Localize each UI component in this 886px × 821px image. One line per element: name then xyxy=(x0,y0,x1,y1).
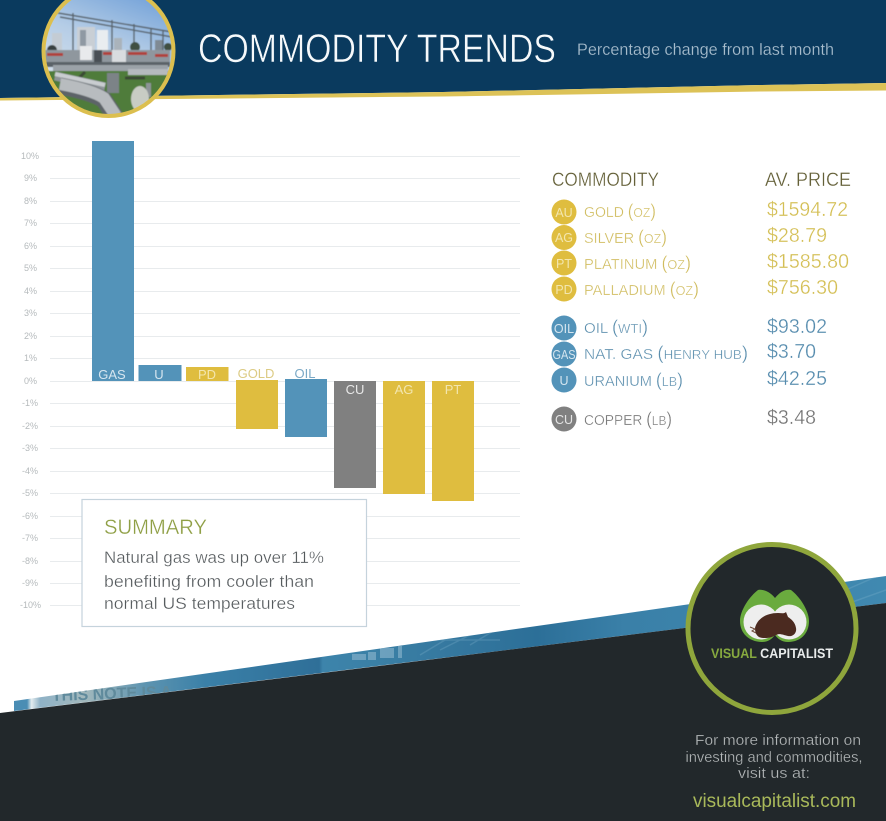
table headers xyxy=(552,170,851,191)
copper row xyxy=(552,406,816,432)
precious metals rows: AU xyxy=(555,206,573,220)
summary text xyxy=(104,548,324,613)
bar labels: CU xyxy=(346,382,364,397)
y axis labels: 2% xyxy=(24,331,37,341)
y axis labels: 5% xyxy=(24,263,37,273)
y axis labels: -8% xyxy=(22,556,38,566)
bar chart xyxy=(20,141,520,610)
energy rows: $93.02 xyxy=(767,316,827,338)
header band xyxy=(0,0,886,100)
bar labels: AG xyxy=(395,382,413,397)
y axis labels: 8% xyxy=(24,196,37,206)
summary text: Natural gas was up over 11% xyxy=(104,548,324,567)
table headers: COMMODITY xyxy=(552,170,659,191)
summary text: normal US temperatures xyxy=(104,594,295,613)
y axis labels: -9% xyxy=(22,578,38,588)
summary panel xyxy=(82,500,366,626)
title: COMMODITY TRENDS xyxy=(198,27,556,71)
y axis labels: -10% xyxy=(20,600,41,610)
summary text: benefiting from cooler than xyxy=(104,572,314,591)
energy rows: $42.25 xyxy=(767,368,827,390)
table headers: AV. PRICE xyxy=(765,170,851,191)
y axis labels: -2% xyxy=(22,421,38,431)
copper row: COPPER (LB) xyxy=(584,409,672,429)
subtitle: Percentage change from last month xyxy=(577,40,834,59)
footer text: For more information on xyxy=(695,732,861,749)
y axis labels: 7% xyxy=(24,218,37,228)
precious metals rows: PD xyxy=(555,283,573,297)
precious metals rows: $28.79 xyxy=(767,225,827,247)
precious metals rows: $1594.72 xyxy=(767,199,848,221)
logo wordmark: VISUAL CAPITALIST xyxy=(711,646,834,661)
copper row: $3.48 xyxy=(767,407,816,429)
commodity price table xyxy=(552,170,851,432)
website link: visualcapitalist.com xyxy=(693,791,856,812)
energy rows: $3.70 xyxy=(767,341,816,363)
bar labels: GAS xyxy=(98,367,126,382)
precious metals rows: PT xyxy=(556,257,572,271)
bar labels: PT xyxy=(445,382,461,397)
energy rows: GAS xyxy=(552,348,576,362)
dark footer xyxy=(0,603,886,821)
logo badge xyxy=(688,544,856,712)
y axis labels: 1% xyxy=(24,353,37,363)
precious metals rows: $1585.80 xyxy=(767,251,849,273)
precious metals rows: AG xyxy=(555,231,573,245)
y axis labels: -6% xyxy=(22,511,38,521)
y axis labels: -3% xyxy=(22,443,38,453)
precious metals rows: PALLADIUM (OZ) xyxy=(584,279,699,299)
footer text: visit us at: xyxy=(738,765,810,782)
y axis labels: -4% xyxy=(22,466,38,476)
precious metals rows: $756.30 xyxy=(767,277,838,299)
summary heading: SUMMARY xyxy=(104,516,207,539)
textured blue strip xyxy=(14,576,886,711)
bar labels: OIL xyxy=(295,366,315,381)
textured blue strip: THIS NOTE IS A xyxy=(52,684,173,705)
bar labels: GOLD xyxy=(238,366,274,381)
y axis labels: 10% xyxy=(21,151,39,161)
bar labels: U xyxy=(154,367,164,382)
copper row: CU xyxy=(555,413,573,427)
y axis labels: 6% xyxy=(24,241,37,251)
header photo: gas pipeline plant xyxy=(40,0,176,118)
bars xyxy=(92,141,474,501)
y axis labels: 0% xyxy=(24,376,37,386)
y axis labels: 3% xyxy=(24,308,37,318)
precious metals rows: GOLD (OZ) xyxy=(584,201,656,221)
bar labels: PD xyxy=(198,367,216,382)
energy rows: OIL xyxy=(554,322,574,336)
precious metals rows: PLATINUM (OZ) xyxy=(584,253,691,273)
y axis labels: -5% xyxy=(22,488,38,498)
energy rows xyxy=(552,316,827,392)
icon: binoculars with piggy bank xyxy=(740,590,809,642)
precious metals rows xyxy=(552,199,849,302)
y axis labels: 9% xyxy=(24,173,37,183)
energy rows: NAT. GAS (HENRY HUB) xyxy=(584,343,748,363)
energy rows: OIL (WTI) xyxy=(584,317,648,337)
y axis labels xyxy=(20,151,41,610)
y axis labels: -1% xyxy=(22,398,38,408)
footer text: investing and commodities, xyxy=(686,749,862,766)
bar labels xyxy=(98,366,461,397)
energy rows: URANIUM (LB) xyxy=(584,370,683,390)
footer text xyxy=(686,732,862,782)
energy rows: U xyxy=(559,374,569,388)
y axis labels: -7% xyxy=(22,533,38,543)
y axis labels: 4% xyxy=(24,286,37,296)
precious metals rows: SILVER (OZ) xyxy=(584,227,667,247)
